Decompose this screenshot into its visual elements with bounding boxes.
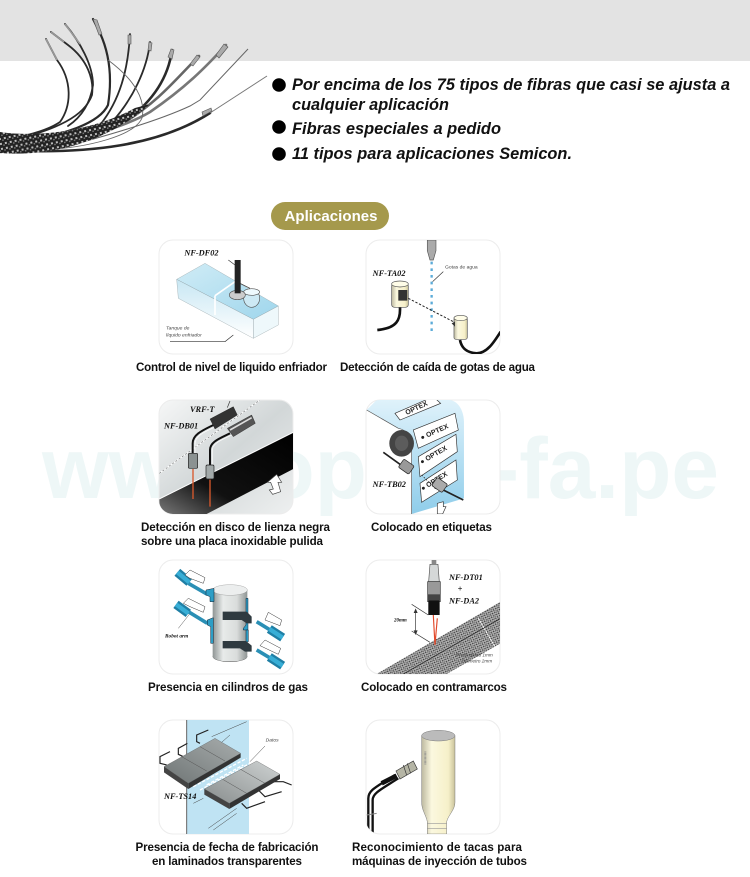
panel: etiquetas: ● OPTEX <box>419 445 449 466</box>
caption 7: en laminados transparentes <box>152 855 302 868</box>
bullet 3: 11 tipos para aplicaciones Semicon. <box>292 144 572 163</box>
label NF-DF02: NF-DF02 <box>183 248 219 257</box>
caption 5: Presencia en cilindros de gas <box>148 681 308 694</box>
label profundidad: Diámetro 2mm <box>462 658 492 663</box>
panel: laminados transparentes <box>159 720 293 834</box>
label NF-TS14: NF-TS14 <box>163 792 196 801</box>
panel: cilindros de gas <box>159 560 293 674</box>
panel: tacas <box>366 720 500 834</box>
caption 7 <box>136 841 318 868</box>
caption 3: Detección en disco de lienza negra <box>141 521 331 534</box>
panel: control de nivel <box>159 240 293 354</box>
bullet 2: Fibras especiales a pedido <box>292 119 501 138</box>
heading: Aplicaciones <box>271 202 389 230</box>
caption 8: máquinas de inyección de tubos <box>352 855 527 868</box>
panel: etiquetas: OPTEX <box>405 400 429 417</box>
label NF-DT01 + NF-DA2: NF-DA2 <box>448 597 479 606</box>
label tanque: líquido enfriador <box>166 333 202 339</box>
caption 8: Reconocimiento de tacas para <box>352 841 523 854</box>
label NF-DB01: NF-DB01 <box>163 422 198 431</box>
caption 7: Presencia de fecha de fabricación <box>136 841 318 854</box>
panel: etiquetas: ● OPTEX <box>420 471 449 493</box>
caption 3: sobre una placa inoxidable pulida <box>141 535 324 548</box>
label NF-TA02: NF-TA02 <box>372 269 406 278</box>
watermark: www.optex-fa.pe <box>41 421 719 517</box>
label robot arm: Robot arm <box>165 633 188 639</box>
bullet 1: Por encima de los 75 tipos de fibras que casi se ajusta a <box>292 75 730 94</box>
label NF-DT01 + NF-DA2: NF-DT01 <box>449 573 483 582</box>
caption 6: Colocado en contramarcos <box>361 681 507 694</box>
top grey band <box>0 0 750 61</box>
label NF-DT01 + NF-DA2: + <box>458 585 463 594</box>
fiber optic cables image <box>0 19 267 154</box>
heading: Aplicaciones: Aplicaciones <box>284 208 378 225</box>
caption 8 <box>352 841 527 868</box>
caption 3 <box>141 521 331 548</box>
bullet 1: cualquier aplicación <box>292 95 449 114</box>
label tanque: Tanque de <box>166 325 189 331</box>
bullet 1 <box>272 75 730 114</box>
label NF-TB02: NF-TB02 <box>372 480 406 489</box>
label profundidad: Profundidad 1mm <box>456 652 493 657</box>
label VRF-T: VRF-T <box>190 405 215 414</box>
panel: etiquetas: ● OPTEX <box>420 423 450 442</box>
label gotas: Gotas de agua <box>445 265 478 271</box>
caption 1: Control de nivel de liquido enfriador <box>136 361 327 374</box>
caption 4: Colocado en etiquetas <box>371 521 492 534</box>
label 20mm: 20mm <box>393 619 407 624</box>
label datos: Datos <box>266 738 279 744</box>
panel: gotas de agua <box>366 240 501 354</box>
bullet list <box>272 75 730 163</box>
caption 2: Detección de caída de gotas de agua <box>340 361 536 374</box>
panel: etiquetas <box>366 397 500 514</box>
panel: disco de lienza negra <box>159 400 293 514</box>
panel: contramarcos <box>366 560 501 674</box>
